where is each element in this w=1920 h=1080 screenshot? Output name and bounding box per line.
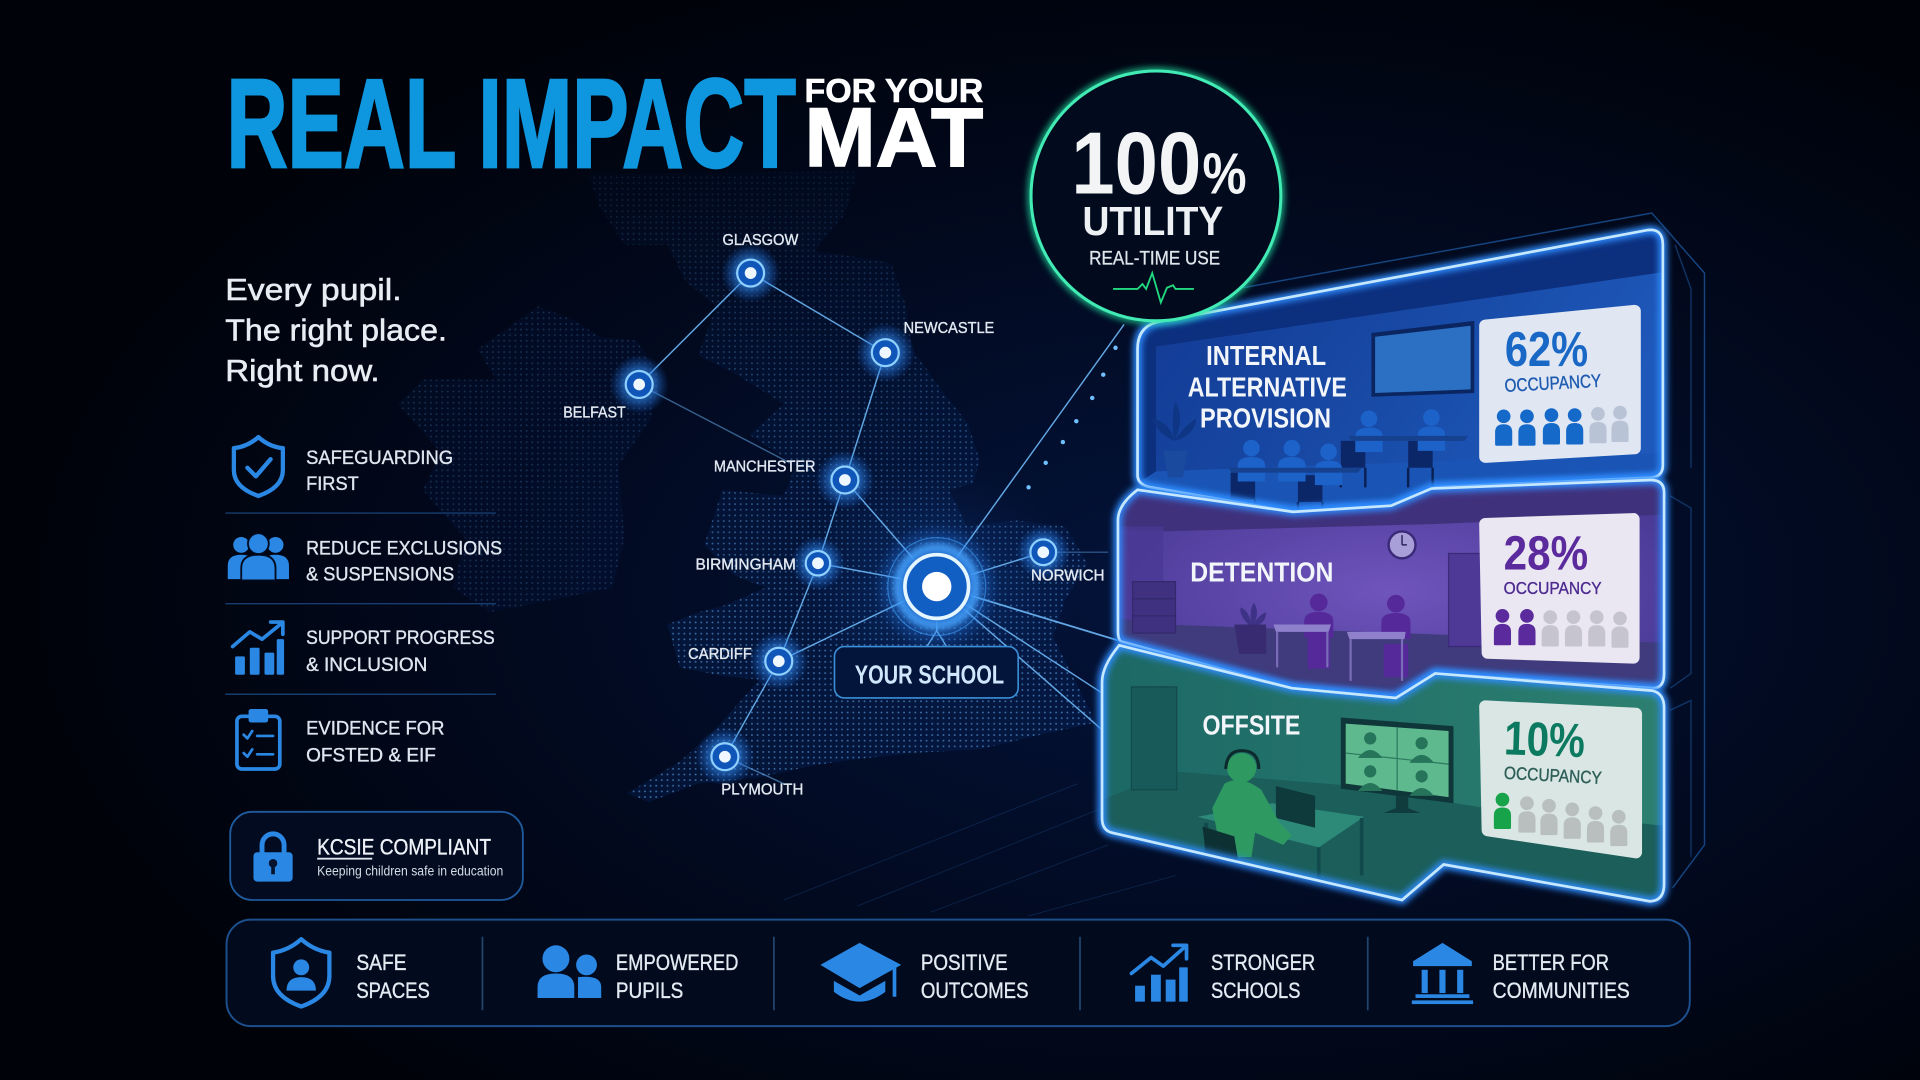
icon: people xyxy=(228,533,289,580)
scene: clock xyxy=(1389,531,1416,558)
panel: internal alternative provision xyxy=(1127,220,1671,522)
city labels: PLYMOUTH xyxy=(721,782,803,799)
city labels: NEWCASTLE xyxy=(904,320,994,337)
icon: community building xyxy=(1412,943,1473,1004)
node: your school hub xyxy=(873,523,1000,650)
text: reduce exclusions: & SUSPENSIONS xyxy=(306,563,454,585)
text: better for communities: COMMUNITIES xyxy=(1493,978,1630,1003)
icon: graduation cap xyxy=(820,943,901,1002)
panel: detention xyxy=(1108,478,1671,704)
heading: internal alternative provision: PROVISION xyxy=(1200,402,1331,433)
scene: wall screen xyxy=(1371,321,1474,397)
card: 10% occupancy: 10% xyxy=(1503,712,1586,768)
card: 28% occupancy: OCCUPANCY xyxy=(1504,578,1602,598)
city labels: MANCHESTER xyxy=(714,458,816,475)
text: stronger schools: SCHOOLS xyxy=(1211,978,1300,1003)
badge: 100% utility: UTILITY xyxy=(1082,198,1223,244)
city labels: CARDIFF xyxy=(688,646,752,663)
heading: detention: DETENTION xyxy=(1190,557,1333,588)
scene: students at desks xyxy=(1273,594,1410,681)
city labels: BIRMINGHAM xyxy=(696,556,796,573)
text: positive outcomes: OUTCOMES xyxy=(921,978,1029,1003)
heading: internal alternative provision: INTERNAL xyxy=(1206,340,1326,371)
scene: bookshelf xyxy=(1133,582,1176,633)
text: safe spaces: SPACES xyxy=(356,978,430,1003)
text: support progress: SUPPORT PROGRESS xyxy=(306,627,495,649)
city labels xyxy=(563,232,1104,799)
outer building wireframe xyxy=(1243,213,1704,888)
card: 62% occupancy xyxy=(1485,311,1635,457)
tagline: The right place. xyxy=(225,313,447,347)
scene: plant xyxy=(1234,602,1266,654)
text: better for communities: BETTER FOR xyxy=(1493,950,1609,975)
tagline xyxy=(225,273,447,388)
network connection lines xyxy=(639,273,1124,784)
icon: shield check xyxy=(234,437,283,496)
heading: internal alternative provision xyxy=(1188,340,1347,433)
node: Birmingham xyxy=(791,536,845,590)
city labels: GLASGOW xyxy=(722,232,798,249)
badge: 100% utility: % xyxy=(1202,141,1247,206)
title: MAT xyxy=(804,91,983,184)
scene: door xyxy=(1449,553,1485,647)
callout: KCSIE compliant: KCSIE COMPLIANT xyxy=(317,835,491,860)
node: Manchester xyxy=(816,451,874,509)
scene: students and desks xyxy=(1228,409,1468,509)
text: better for communities xyxy=(1493,950,1630,1003)
scene: person with headset xyxy=(1202,749,1292,860)
label: your school: YOUR SCHOOL xyxy=(855,661,1004,689)
heading: internal alternative provision: ALTERNATIVE xyxy=(1188,372,1347,403)
icon: padlock xyxy=(253,834,293,882)
node: Glasgow xyxy=(721,244,780,302)
icon: safe spaces shield xyxy=(273,939,329,1007)
badge: 100% utility: 100 xyxy=(1071,113,1201,212)
map: dotted UK and Ireland xyxy=(367,159,1176,916)
callout: KCSIE compliant: Keeping children safe in education xyxy=(317,864,503,879)
title: FOR YOUR xyxy=(804,73,983,110)
scene: door xyxy=(1131,687,1177,790)
badge: 100% utility xyxy=(1031,71,1281,321)
scene: plant xyxy=(1152,402,1196,478)
node: Newcastle xyxy=(856,323,915,382)
panel: bottom outcomes bar xyxy=(227,920,1690,1026)
heading: offsite: OFFSITE xyxy=(1202,710,1300,741)
dotted trail to the panels xyxy=(1026,346,1118,490)
label: your school xyxy=(834,647,1018,698)
tagline: Right now. xyxy=(225,354,380,388)
node: Norwich xyxy=(1016,525,1070,579)
text: evidence for ofsted: EVIDENCE FOR xyxy=(306,718,444,740)
city labels: NORWICH xyxy=(1031,567,1104,584)
card: 62% occupancy: 62% xyxy=(1505,323,1588,377)
card: 10% occupancy: OCCUPANCY xyxy=(1503,763,1602,788)
badge: 100% utility: REAL-TIME USE xyxy=(1089,247,1220,269)
tagline: Every pupil. xyxy=(225,273,402,307)
card: 28% occupancy xyxy=(1485,519,1633,658)
text: safe spaces xyxy=(356,950,430,1003)
scene: video call monitor xyxy=(1341,718,1453,813)
scene: desk and laptop xyxy=(1198,786,1364,878)
text: safeguarding first: SAFEGUARDING xyxy=(306,447,453,469)
card: 62% occupancy: OCCUPANCY xyxy=(1504,370,1602,396)
icon: stronger schools chart xyxy=(1131,945,1188,1002)
list: benefits xyxy=(225,437,502,769)
icon: pulse line xyxy=(1113,273,1194,302)
text: empowered pupils xyxy=(616,950,738,1003)
text: support progress xyxy=(306,627,495,676)
text: evidence for ofsted xyxy=(306,718,444,767)
node: Cardiff xyxy=(749,632,808,691)
text: safeguarding first xyxy=(306,447,453,495)
text: stronger schools: STRONGER xyxy=(1211,950,1315,975)
icon: growth chart xyxy=(233,622,284,675)
text: support progress: & INCLUSION xyxy=(306,654,427,676)
icon: empowered pupils xyxy=(538,945,601,998)
panel: offsite xyxy=(1096,643,1671,906)
text: stronger schools xyxy=(1211,950,1315,1003)
text: evidence for ofsted: OFSTED & EIF xyxy=(306,745,436,767)
callout: KCSIE compliant xyxy=(230,812,523,900)
text: positive outcomes: POSITIVE xyxy=(921,950,1008,975)
text: positive outcomes xyxy=(921,950,1029,1003)
icon: clipboard xyxy=(237,709,280,769)
text: safeguarding first: FIRST xyxy=(306,473,359,495)
text: safe spaces: SAFE xyxy=(356,950,407,975)
node: Belfast xyxy=(610,355,669,414)
card: 10% occupancy xyxy=(1485,707,1636,852)
text: empowered pupils: EMPOWERED xyxy=(616,950,738,975)
card: 28% occupancy: 28% xyxy=(1504,527,1588,580)
text: reduce exclusions: REDUCE EXCLUSIONS xyxy=(306,538,502,560)
text: reduce exclusions xyxy=(306,538,502,585)
title: REAL IMPACT xyxy=(227,53,796,194)
city labels: BELFAST xyxy=(563,405,626,422)
node: Plymouth xyxy=(696,727,754,786)
text: empowered pupils: PUPILS xyxy=(616,978,683,1003)
